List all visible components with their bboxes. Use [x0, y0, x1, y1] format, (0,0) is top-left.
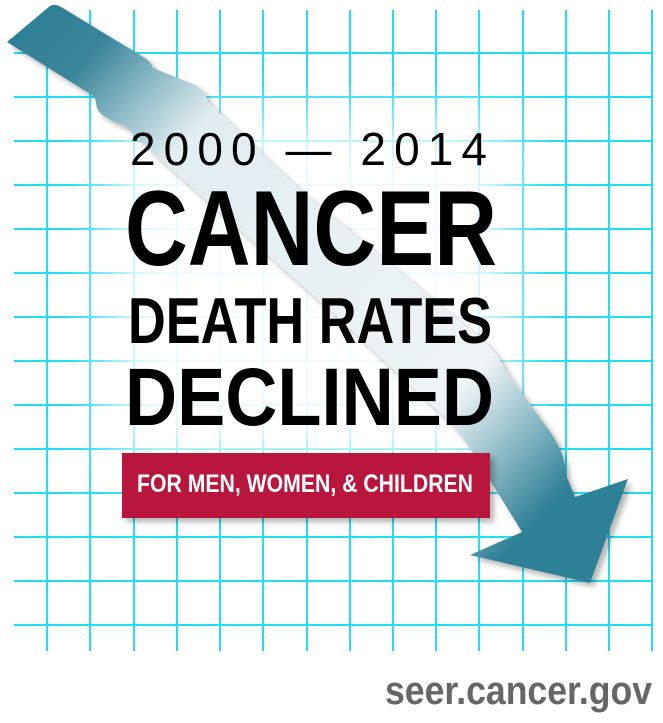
arrow	[7, 5, 628, 583]
heading: DECLINED: DECLINED	[125, 352, 494, 443]
red banner	[122, 453, 490, 518]
glow behind text	[110, 120, 510, 460]
heading: DEATH RATES: DEATH RATES	[128, 284, 492, 357]
banner text: FOR MEN, WOMEN, & CHILDREN	[137, 470, 473, 498]
heading: years: 2000 — 2014	[130, 123, 487, 175]
heading: CANCER: CANCER	[125, 168, 497, 288]
